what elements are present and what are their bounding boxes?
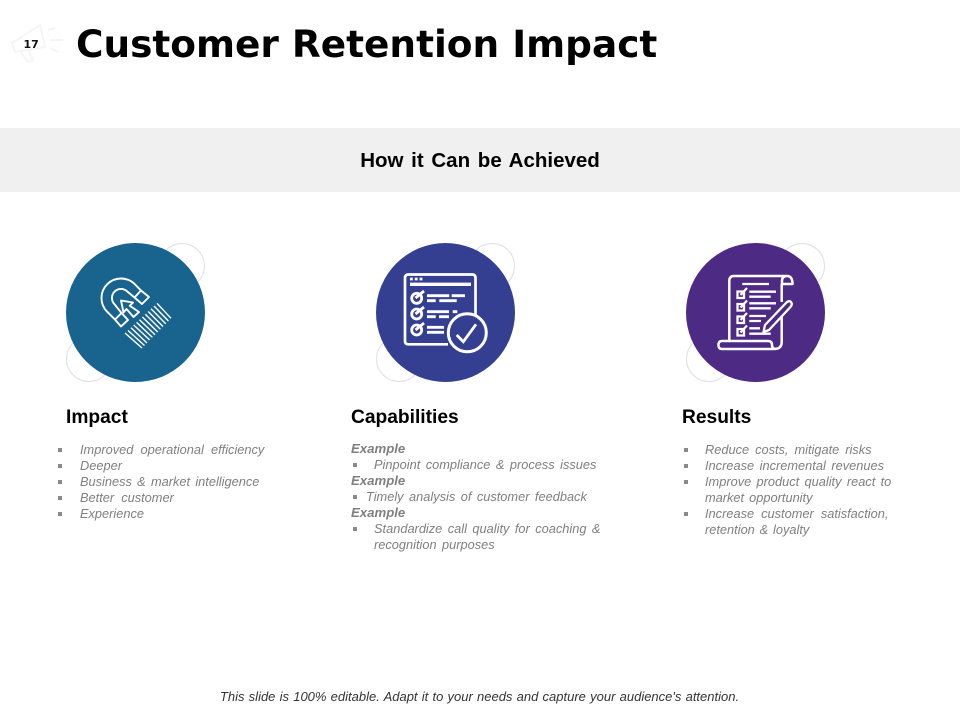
slide number: 17 [24, 38, 39, 51]
list: capabilities items: Pinpoint compliance & process issues [374, 457, 596, 472]
list: impact items: Improved operational efficiency [80, 442, 264, 457]
list: capabilities items: Example [351, 505, 405, 520]
footer note: This slide is 100% editable. Adapt it to your needs and capture your audience's attention. [220, 689, 739, 704]
heading band [0, 128, 960, 192]
list: impact items [58, 442, 265, 521]
list: results items: retention & loyalty [705, 522, 809, 537]
list: impact items: Deeper [80, 458, 122, 473]
list: results items: Improve product quality react to [705, 474, 891, 489]
list: impact items: Experience [80, 506, 144, 521]
list: capabilities items: Example [351, 473, 405, 488]
list: results items: Increase customer satisfaction, [705, 506, 888, 521]
list: capabilities items [351, 441, 600, 552]
icon: checklist in indigo circle [376, 243, 515, 382]
icon: magnet in blue circle [66, 243, 205, 382]
list: capabilities items: Standardize call quality for coaching & [374, 521, 600, 536]
list: results items: market opportunity [705, 490, 812, 505]
heading: capabilities: Capabilities [351, 407, 459, 428]
list: results items [684, 442, 891, 537]
panel: capabilities [351, 243, 600, 552]
icon: scroll checklist with pen in purple circle [686, 243, 825, 382]
icon: megaphone slide-number badge [11, 24, 63, 63]
list: impact items: Business & market intelligence [80, 474, 259, 489]
list: capabilities items: recognition purposes [374, 537, 495, 552]
title: Customer Retention Impact [76, 22, 657, 66]
list: capabilities items: Timely analysis of customer feedback [366, 489, 587, 504]
list: results items: Increase incremental revenues [705, 458, 884, 473]
heading band: How it Can be Achieved [360, 149, 600, 172]
heading: impact: Impact [66, 407, 128, 428]
list: impact items: Better customer [80, 490, 174, 505]
panel: impact [58, 243, 265, 521]
list: results items: Reduce costs, mitigate risks [705, 442, 872, 457]
panel: results [682, 243, 891, 537]
list: capabilities items: Example [351, 441, 405, 456]
heading: results: Results [682, 407, 751, 428]
